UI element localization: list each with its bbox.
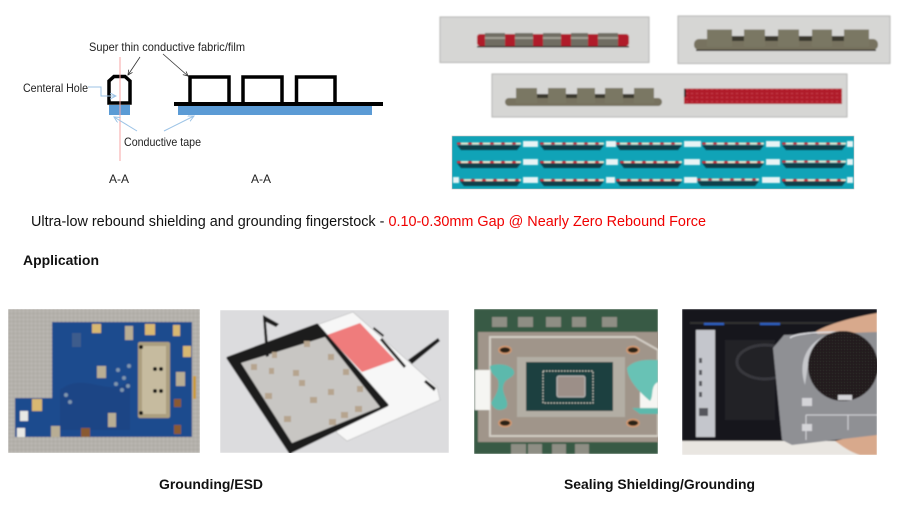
label: conductive tape: Conductive tape: [124, 135, 201, 149]
single profile conductive tape: [109, 105, 130, 115]
photo: fingerstock strips on teal liner: [452, 136, 854, 189]
section line: [119, 57, 121, 161]
caption: grounding/ESD: Grounding/ESD: [159, 476, 263, 492]
arrow: tape right: [164, 116, 194, 131]
photo: metal clip and red fabric core: [492, 74, 847, 117]
label: super thin conductive fabric/film: Super thin conductive fabric/film: [89, 40, 245, 54]
label: section A-A right: A-A: [251, 172, 271, 186]
strip conductive tape: [178, 106, 372, 115]
label: section A-A left: A-A: [109, 172, 129, 186]
photo: bare metal fingerstock: [678, 16, 890, 64]
photo: CPU die on board: [474, 309, 660, 454]
photo: fingerstock with red core: [440, 17, 649, 62]
subtitle: Ultra-low rebound shielding and grounding fingerstock - 0.10-0.30mm Gap @ Nearly Zero Rebound Force: [31, 214, 706, 230]
caption: sealing shielding/grounding: Sealing Shielding/Grounding: [564, 476, 755, 492]
strip profile section: [174, 77, 383, 106]
arrow: central hole: [88, 87, 116, 96]
arrow: fabric to single profile: [128, 57, 140, 75]
label: central hole: Centeral Hole: [23, 81, 88, 95]
heading: application: Application: [23, 252, 99, 268]
photo: device with mesh panel: [682, 309, 878, 455]
arrow: fabric to strip profile: [163, 54, 188, 76]
single profile section: [109, 76, 130, 103]
cross-section diagram: [23, 40, 383, 186]
photo: tablet with foam gaskets: [220, 310, 449, 453]
arrow: tape left: [114, 117, 137, 131]
photo: PCB board: [8, 309, 200, 453]
